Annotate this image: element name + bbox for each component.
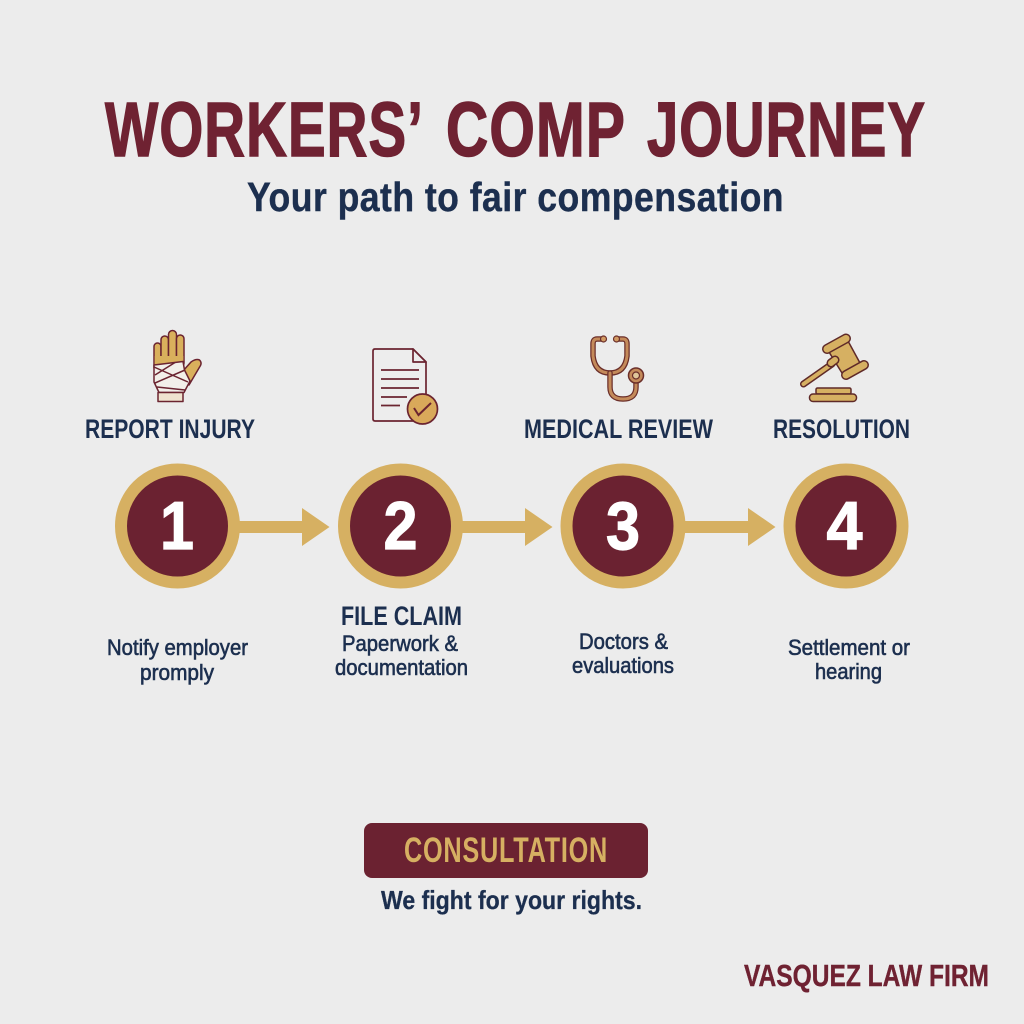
consultation button (364, 823, 648, 878)
step 3 description: evaluations (572, 653, 674, 678)
step 4 description (788, 635, 910, 684)
consultation button: CONSULTATION (404, 831, 608, 870)
icon: bandaged hand (154, 330, 201, 402)
label: medical review: MEDICAL REVIEW (524, 414, 713, 444)
icon: gavel (804, 338, 864, 402)
icon: stethoscope (593, 336, 644, 399)
arrow: step 2 to 3 (459, 508, 552, 546)
step 2 badge: 2 (384, 488, 418, 564)
step 2 label: file claim: FILE CLAIM (341, 601, 462, 631)
arrow: step 1 to 2 (236, 508, 330, 546)
step 4 badge (790, 470, 902, 582)
tagline: We fight for your rights. (381, 885, 642, 915)
step 3 badge: 3 (606, 488, 640, 564)
step 3 description: Doctors & (579, 629, 668, 654)
title: COMP (446, 87, 626, 173)
step 1 description: promply (140, 660, 214, 685)
step 3 badge (566, 470, 680, 582)
step 1 description: Notify employer (107, 635, 248, 660)
step 4 description: Settlement or (788, 635, 910, 660)
title: WORKERS’ (105, 87, 424, 173)
subtitle: Your path to fair compensation (247, 174, 784, 220)
title (105, 87, 926, 173)
step 2 description: documentation (335, 655, 468, 680)
label: resolution: RESOLUTION (773, 414, 910, 444)
step 2 badge (344, 470, 457, 582)
step 2 description: Paperwork & (342, 631, 458, 656)
step 1 description (107, 635, 248, 685)
step 3 description (572, 629, 674, 678)
step 4 description: hearing (815, 659, 882, 684)
arrow: step 3 to 4 (682, 508, 776, 546)
title: JOURNEY (647, 87, 926, 173)
step 1 badge (121, 470, 234, 582)
icon: claim document (373, 349, 438, 424)
step 1 badge: 1 (160, 488, 194, 564)
label: report injury: REPORT INJURY (85, 414, 255, 444)
step 2 description (335, 631, 468, 680)
step 4 badge: 4 (826, 488, 863, 564)
